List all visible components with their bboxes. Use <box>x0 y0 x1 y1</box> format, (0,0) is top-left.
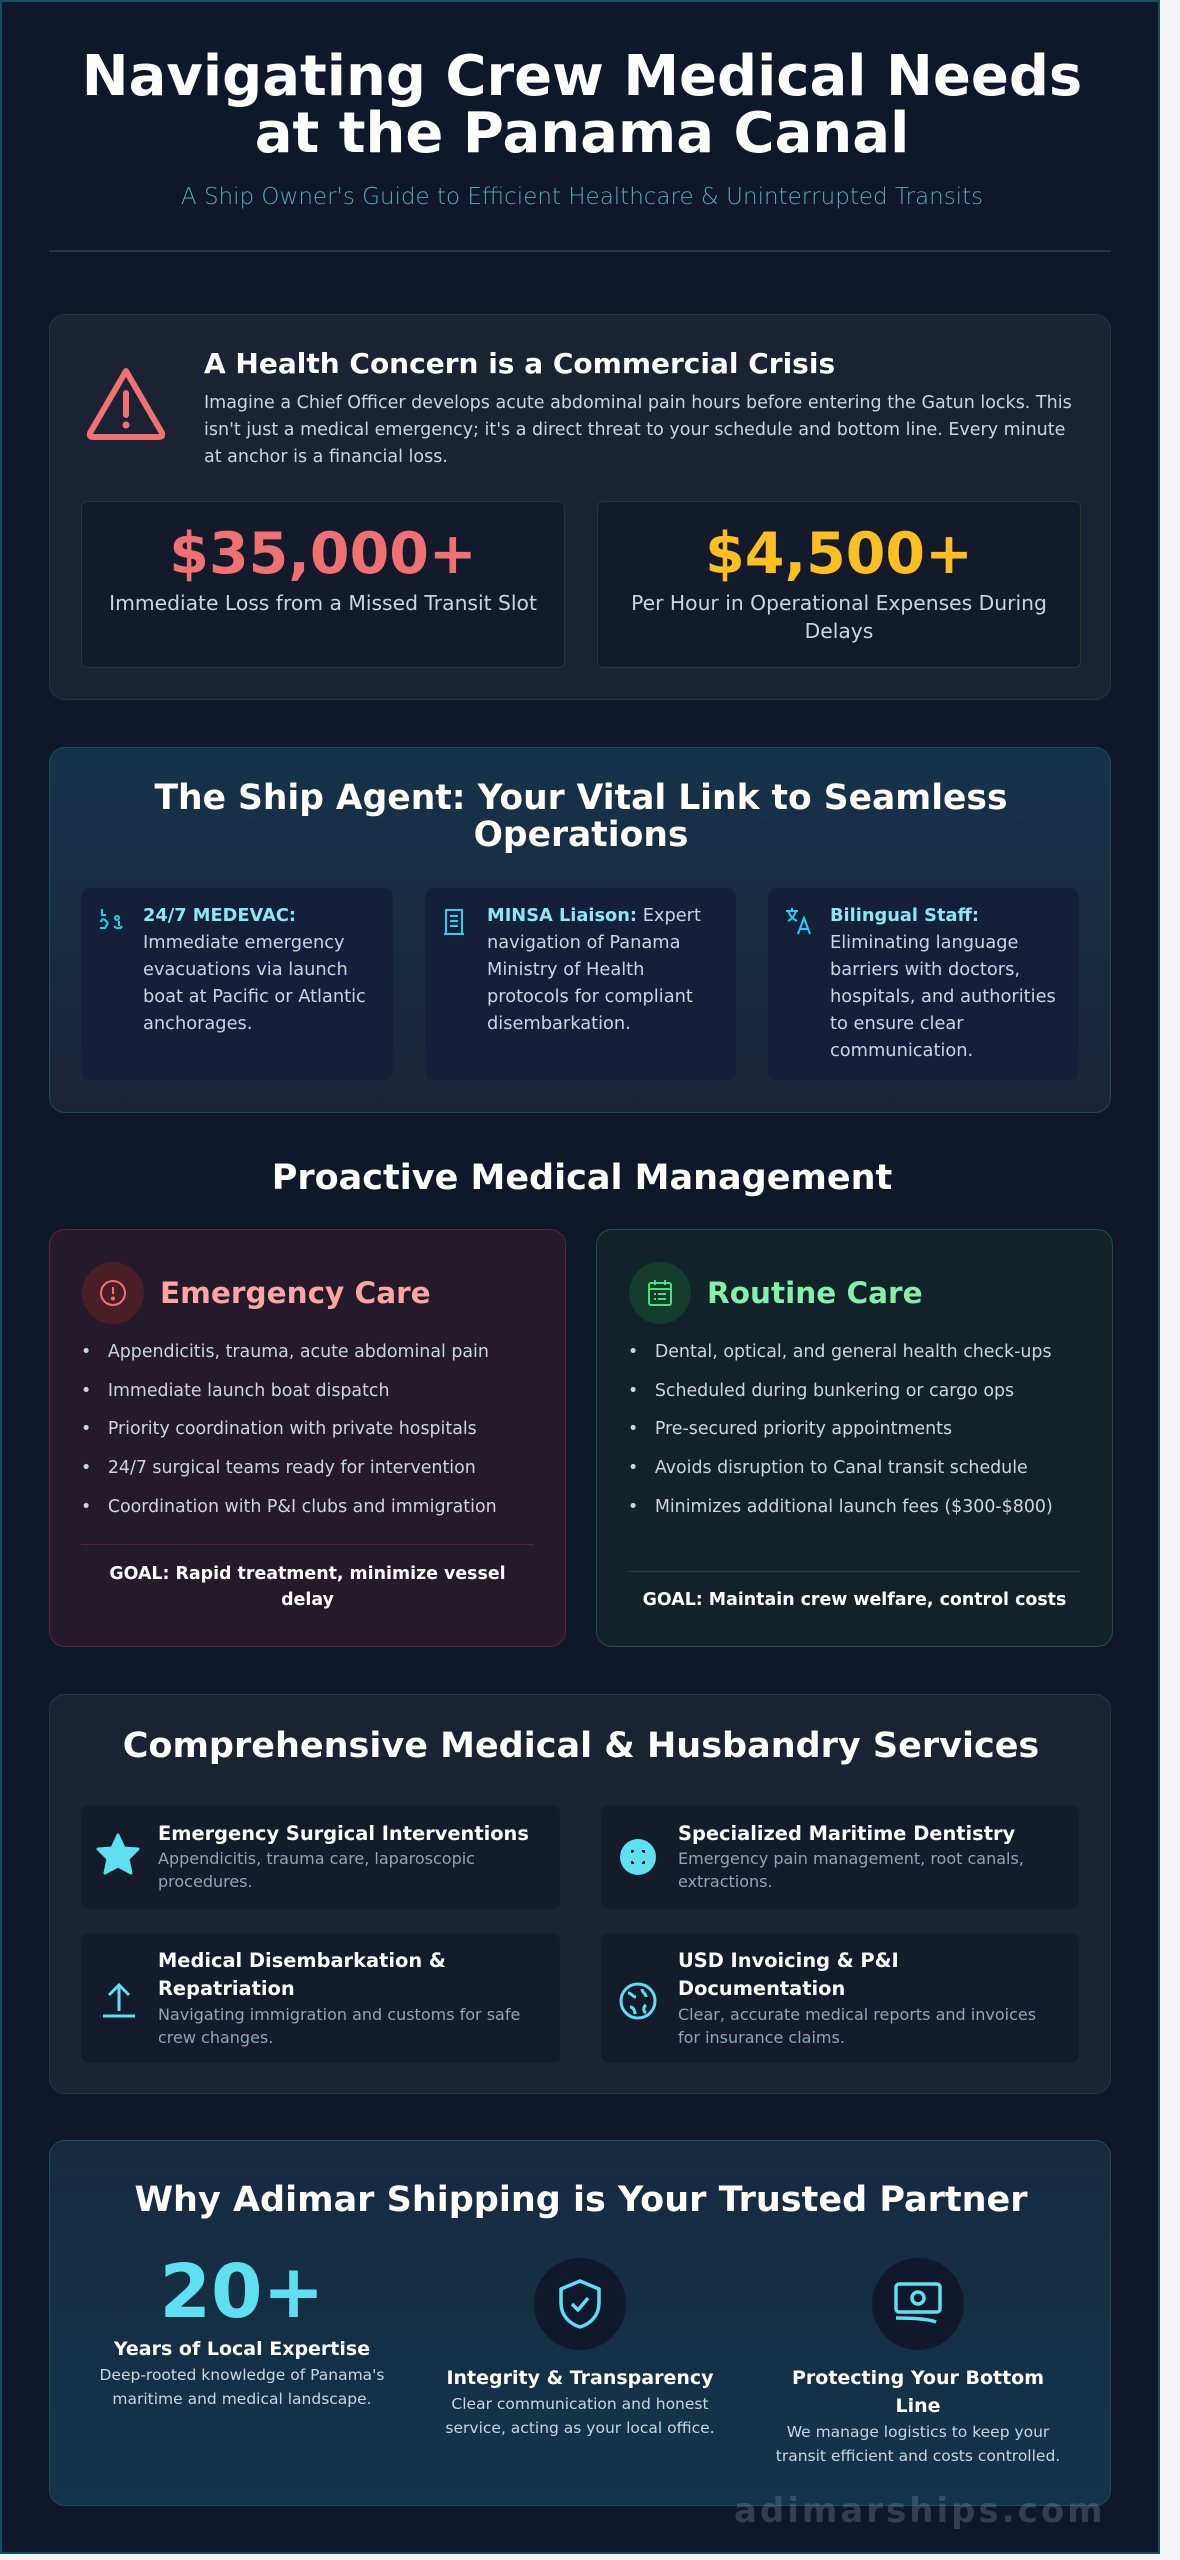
heading <box>154 778 1008 855</box>
panel: services <box>49 1694 1111 2094</box>
card: medevac: 24/7 MEDEVAC: Immediate emergency evacuations via launch boat at Pacific or Atlantic anchorages. <box>143 905 366 1034</box>
column: integrity: Clear communication and honest service, acting as your local office. <box>445 2395 715 2437</box>
title: at the Panama Canal <box>255 101 909 166</box>
list: • Dental, optical, and general health check-ups <box>628 1342 1052 1362</box>
panel: routine care <box>596 1229 1113 1647</box>
stat: missed slot: $35,000+ <box>169 521 477 587</box>
card: surgical: Emergency Surgical Interventions <box>158 1822 529 1845</box>
heading: Why Adimar Shipping is Your Trusted Partner <box>134 2180 1028 2220</box>
card: disembarkation <box>81 1933 560 2063</box>
stat: per hour: Per Hour in Operational Expenses During Delays <box>631 591 1047 643</box>
icon: medevac <box>100 909 123 930</box>
card: invoicing: Clear, accurate medical reports and invoices for insurance claims. <box>678 2005 1036 2047</box>
icon: alert circle <box>82 1262 144 1324</box>
card: invoicing: USD Invoicing & P&I <box>678 1949 899 1972</box>
heading: Operations <box>474 815 688 855</box>
icon: star <box>96 1834 140 1875</box>
card: surgical <box>81 1805 560 1909</box>
subtitle: A Ship Owner's Guide to Efficient Healthcare & Uninterrupted Transits <box>181 184 983 210</box>
card: disembarkation: Navigating immigration and customs for safe crew changes. <box>158 2005 520 2047</box>
column: years: Years of Local Expertise <box>114 2338 370 2360</box>
heading: Routine Care <box>707 1276 923 1310</box>
list <box>81 1342 497 1517</box>
heading: The Ship Agent: Your Vital Link to Seamless <box>154 778 1008 818</box>
heading: proactive: Proactive Medical Management <box>272 1158 892 1198</box>
goal: GOAL: Rapid treatment, minimize vessel delay <box>109 1564 506 1610</box>
card: minsa: MINSA Liaison: Expert navigation of Panama Ministry of Health protocols for compliant disembarkation. <box>487 905 701 1034</box>
icon: upload arrow <box>103 1983 135 2018</box>
column: years: 20+ <box>160 2249 324 2335</box>
list: • Immediate launch boat dispatch <box>81 1381 389 1401</box>
panel: ship agent <box>49 747 1111 1113</box>
column: years: Deep-rooted knowledge of Panama's maritime and medical landscape. <box>99 2366 385 2408</box>
icon: document <box>444 909 464 935</box>
card: invoicing: Documentation <box>678 1977 845 2000</box>
icon: shield <box>534 2258 626 2350</box>
icon: warning <box>86 368 166 440</box>
icon: globe <box>620 1982 656 2020</box>
list <box>628 1342 1053 1517</box>
card: minsa <box>425 888 736 1080</box>
text block: Imagine a Chief Officer develops acute abdominal pain hours before entering the Gatun locks. This isn't just a medical emergency; it's a direct threat to your schedule and bottom line. Every minute at anchor is a financial loss. <box>204 393 1072 467</box>
column: years <box>99 2249 385 2408</box>
card: invoicing <box>601 1933 1079 2063</box>
icon: money <box>872 2258 964 2350</box>
goal: GOAL: Maintain crew welfare, control costs <box>643 1590 1066 1610</box>
column: bottom line: We manage logistics to keep your transit efficient and costs controlled. <box>776 2423 1060 2465</box>
card: dentistry <box>601 1805 1079 1909</box>
card: bilingual <box>768 888 1079 1080</box>
stat: per hour <box>597 501 1081 668</box>
list: • Coordination with P&I clubs and immigration <box>81 1497 497 1517</box>
panel: trusted partner <box>49 2140 1111 2506</box>
card: surgical: Appendicitis, trauma care, laparoscopic procedures. <box>158 1849 475 1891</box>
list: • Minimizes additional launch fees ($300-$800) <box>628 1497 1053 1517</box>
list: • Avoids disruption to Canal transit schedule <box>628 1458 1028 1478</box>
column: bottom line: Protecting Your Bottom Line <box>792 2367 1044 2417</box>
heading: Comprehensive Medical & Husbandry Services <box>123 1726 1039 1766</box>
stat: per hour: $4,500+ <box>705 521 973 587</box>
list: • Appendicitis, trauma, acute abdominal pain <box>81 1342 489 1362</box>
stat: missed slot: Immediate Loss from a Missed Transit Slot <box>109 591 537 615</box>
heading: A Health Concern is a Commercial Crisis <box>204 347 835 380</box>
list: • Pre-secured priority appointments <box>628 1419 952 1439</box>
icon: calendar <box>629 1262 691 1324</box>
card: bilingual: Bilingual Staff: Eliminating language barriers with doctors, hospitals, and authorities to ensure clear communication. <box>830 905 1056 1061</box>
card: disembarkation: Medical Disembarkation & Repatriation <box>158 1949 446 2000</box>
list: • 24/7 surgical teams ready for intervention <box>81 1458 476 1478</box>
column: integrity: Integrity & Transparency <box>446 2367 714 2389</box>
icon: tooth <box>620 1839 656 1875</box>
panel: emergency care <box>49 1229 566 1647</box>
card: medevac <box>81 888 393 1080</box>
card: dentistry: Specialized Maritime Dentistry <box>678 1822 1015 1845</box>
list: • Scheduled during bunkering or cargo ops <box>628 1381 1014 1401</box>
icon: language <box>786 908 811 934</box>
column: integrity <box>445 2258 715 2437</box>
list: • Priority coordination with private hospitals <box>81 1419 477 1439</box>
heading: Emergency Care <box>160 1276 431 1310</box>
card: dentistry: Emergency pain management, root canals, extractions. <box>678 1849 1024 1891</box>
title: Navigating Crew Medical Needs <box>82 44 1082 109</box>
stat: missed slot <box>81 501 565 668</box>
watermark: adimarships.com <box>734 2491 1106 2531</box>
title <box>82 44 1082 166</box>
column: bottom line <box>776 2258 1060 2465</box>
panel: commercial crisis <box>49 314 1111 700</box>
